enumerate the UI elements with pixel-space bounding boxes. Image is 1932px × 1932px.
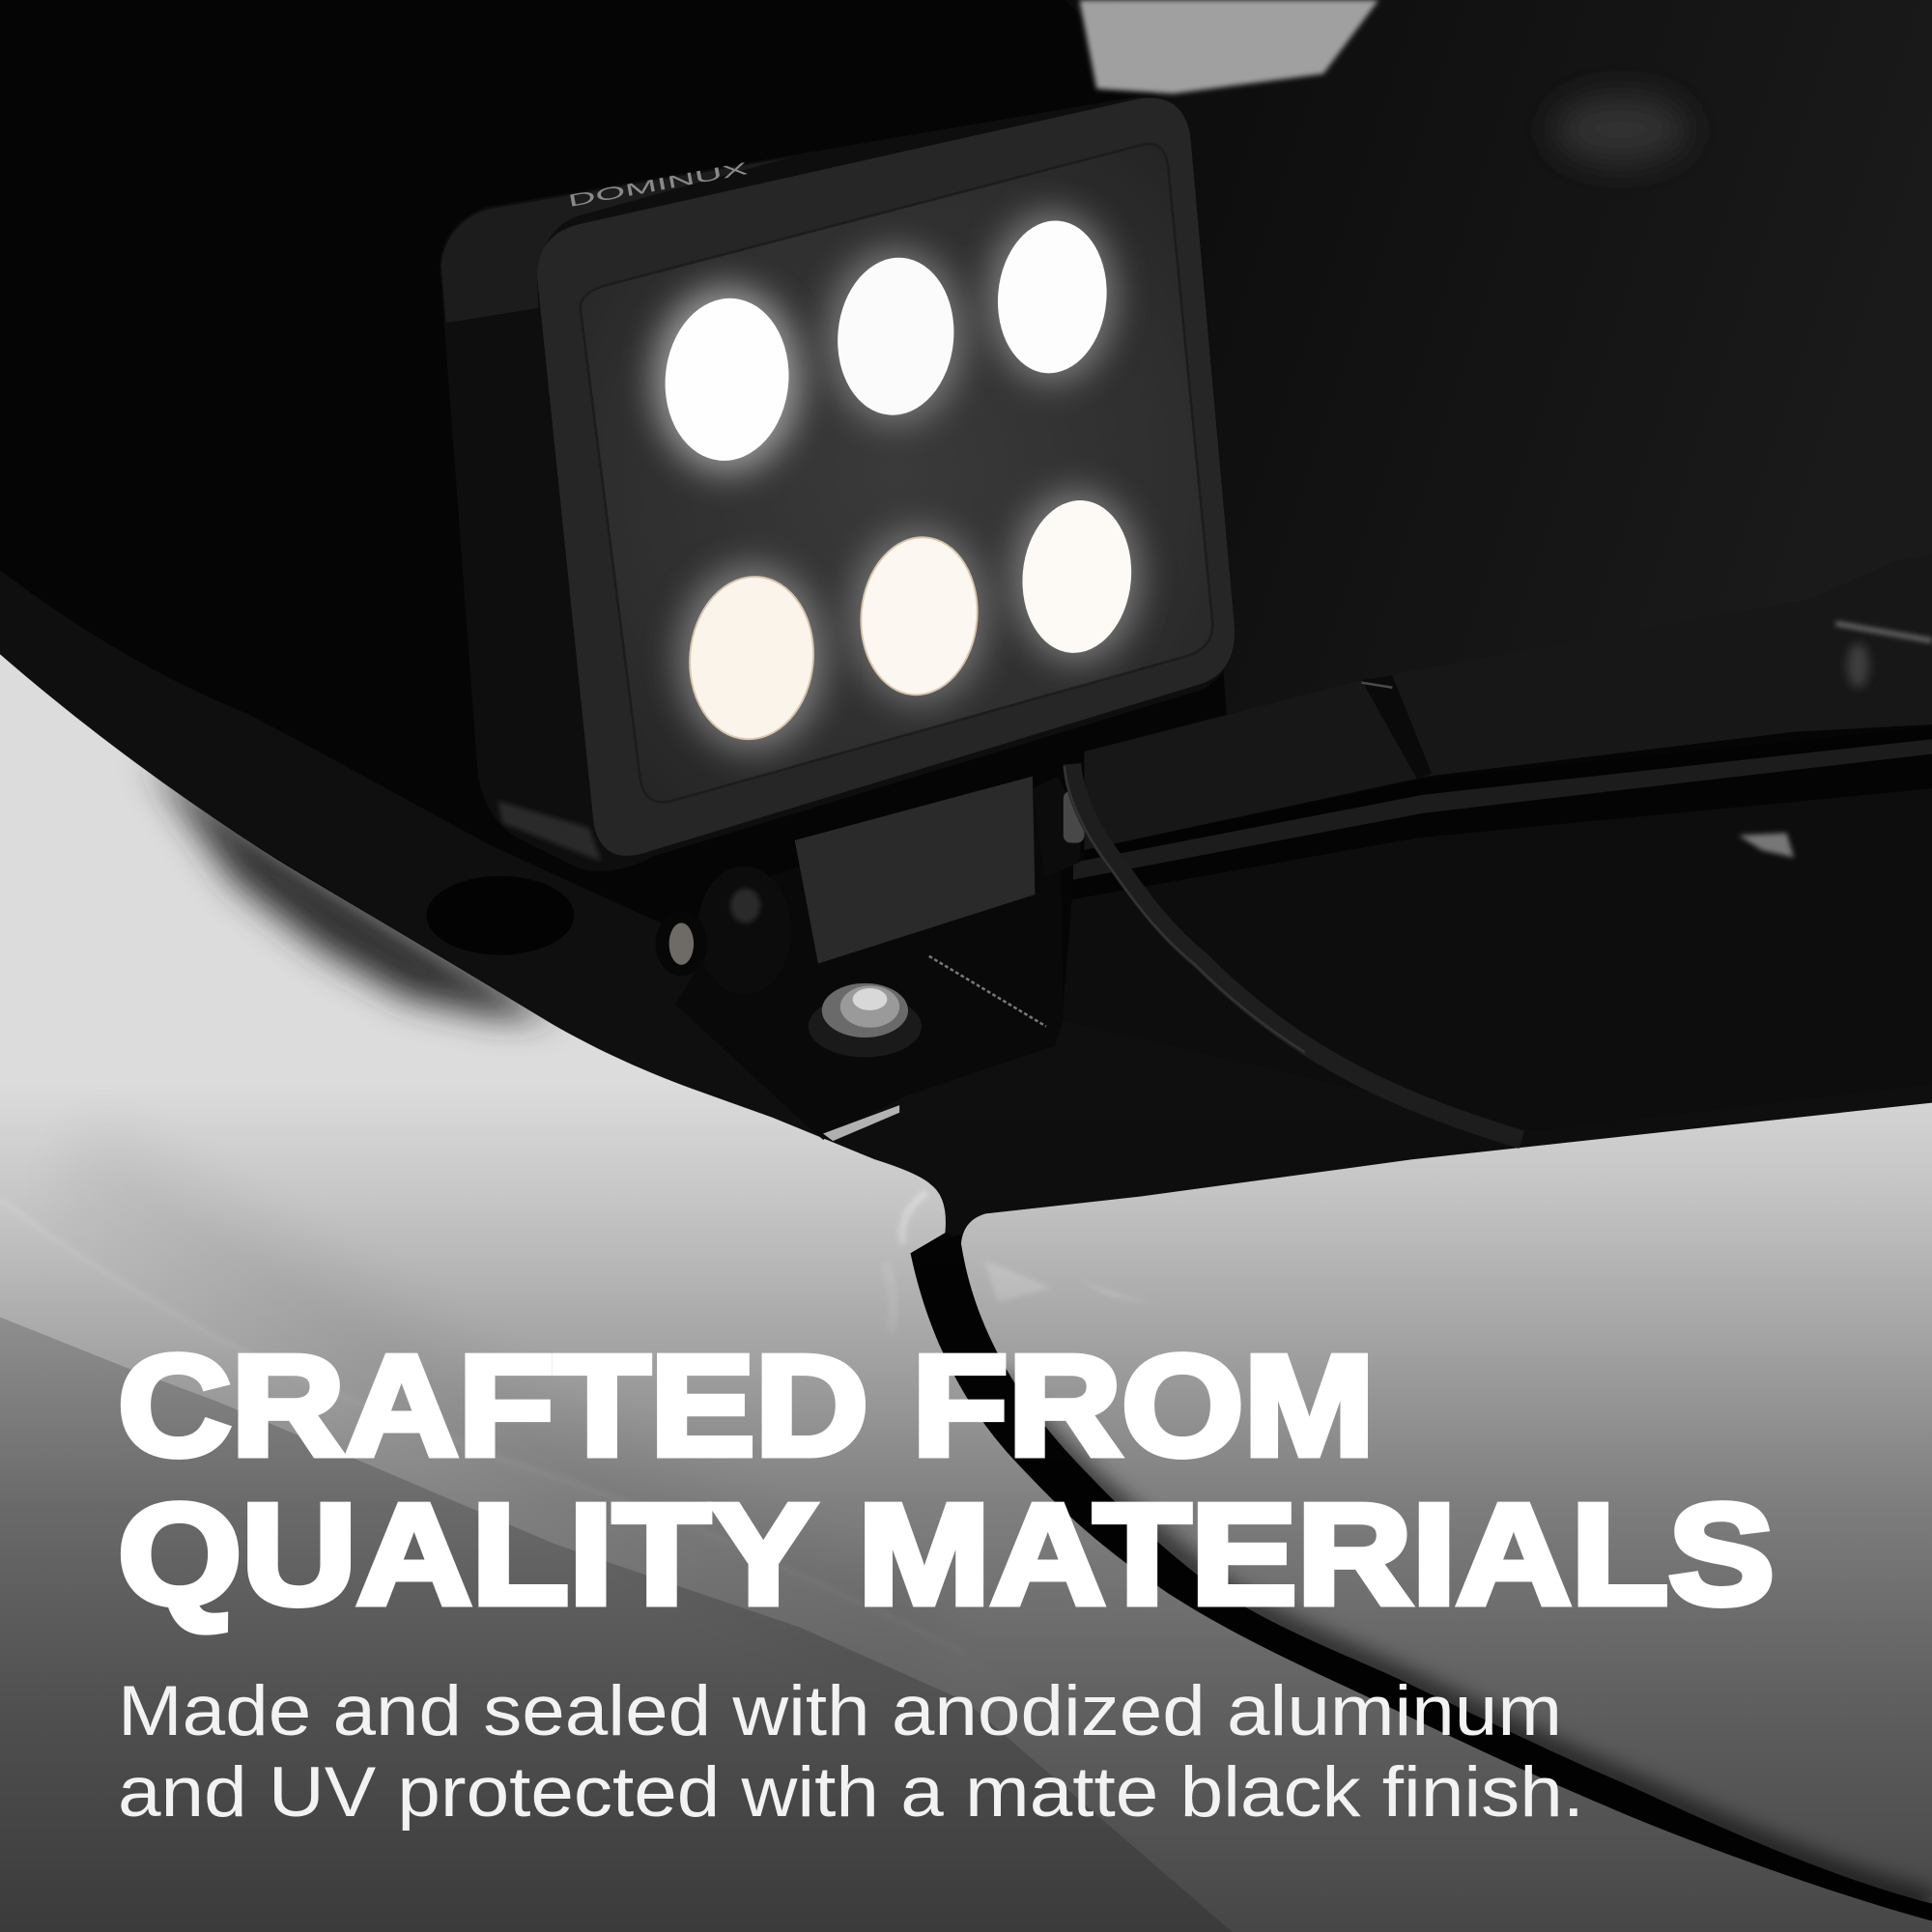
screw xyxy=(809,983,922,1057)
power cable xyxy=(1065,764,1521,1140)
housing side xyxy=(440,96,1235,871)
LED 3 xyxy=(991,216,1113,378)
LED 6 xyxy=(1016,496,1138,658)
darker lower surface xyxy=(0,1318,1233,1932)
left knob xyxy=(697,867,791,994)
LED 4 xyxy=(683,572,820,745)
LED 5 xyxy=(855,532,983,699)
body seam: black gap between panels xyxy=(911,1233,1932,1921)
light housing xyxy=(440,96,1235,871)
heading: QUALITY MATERIALS xyxy=(118,1475,1775,1634)
black trim around the hood xyxy=(0,571,1932,1244)
hole in trim xyxy=(426,876,574,955)
subheading text: Made and sealed with anodized aluminum xyxy=(118,1672,1562,1750)
recessed face xyxy=(581,144,1212,802)
LED 2 xyxy=(831,253,960,420)
left white body panel xyxy=(0,654,1932,1932)
heading: CRAFTED FROM xyxy=(118,1326,1375,1486)
bracket face xyxy=(795,777,1035,963)
shadow cast by trim xyxy=(148,757,554,1016)
glints xyxy=(984,1261,1052,1302)
heading xyxy=(118,1326,1775,1634)
right white body panel xyxy=(961,1103,1932,1904)
brand mark: DOMINUX xyxy=(566,158,750,211)
subheading text xyxy=(118,1672,1584,1832)
subheading text: and UV protected with a matte black finish. xyxy=(118,1753,1584,1832)
corner highlight xyxy=(902,1193,926,1244)
housing frame xyxy=(537,98,1235,856)
right knob xyxy=(1033,777,1082,877)
LED 1 xyxy=(659,293,795,466)
LED glows xyxy=(653,211,1141,752)
vehicle arm behind the light xyxy=(1060,554,1932,1140)
mounting bracket and base xyxy=(656,777,1084,1141)
soft shading above crease xyxy=(95,1160,423,1363)
bright crease band xyxy=(0,1199,966,1652)
